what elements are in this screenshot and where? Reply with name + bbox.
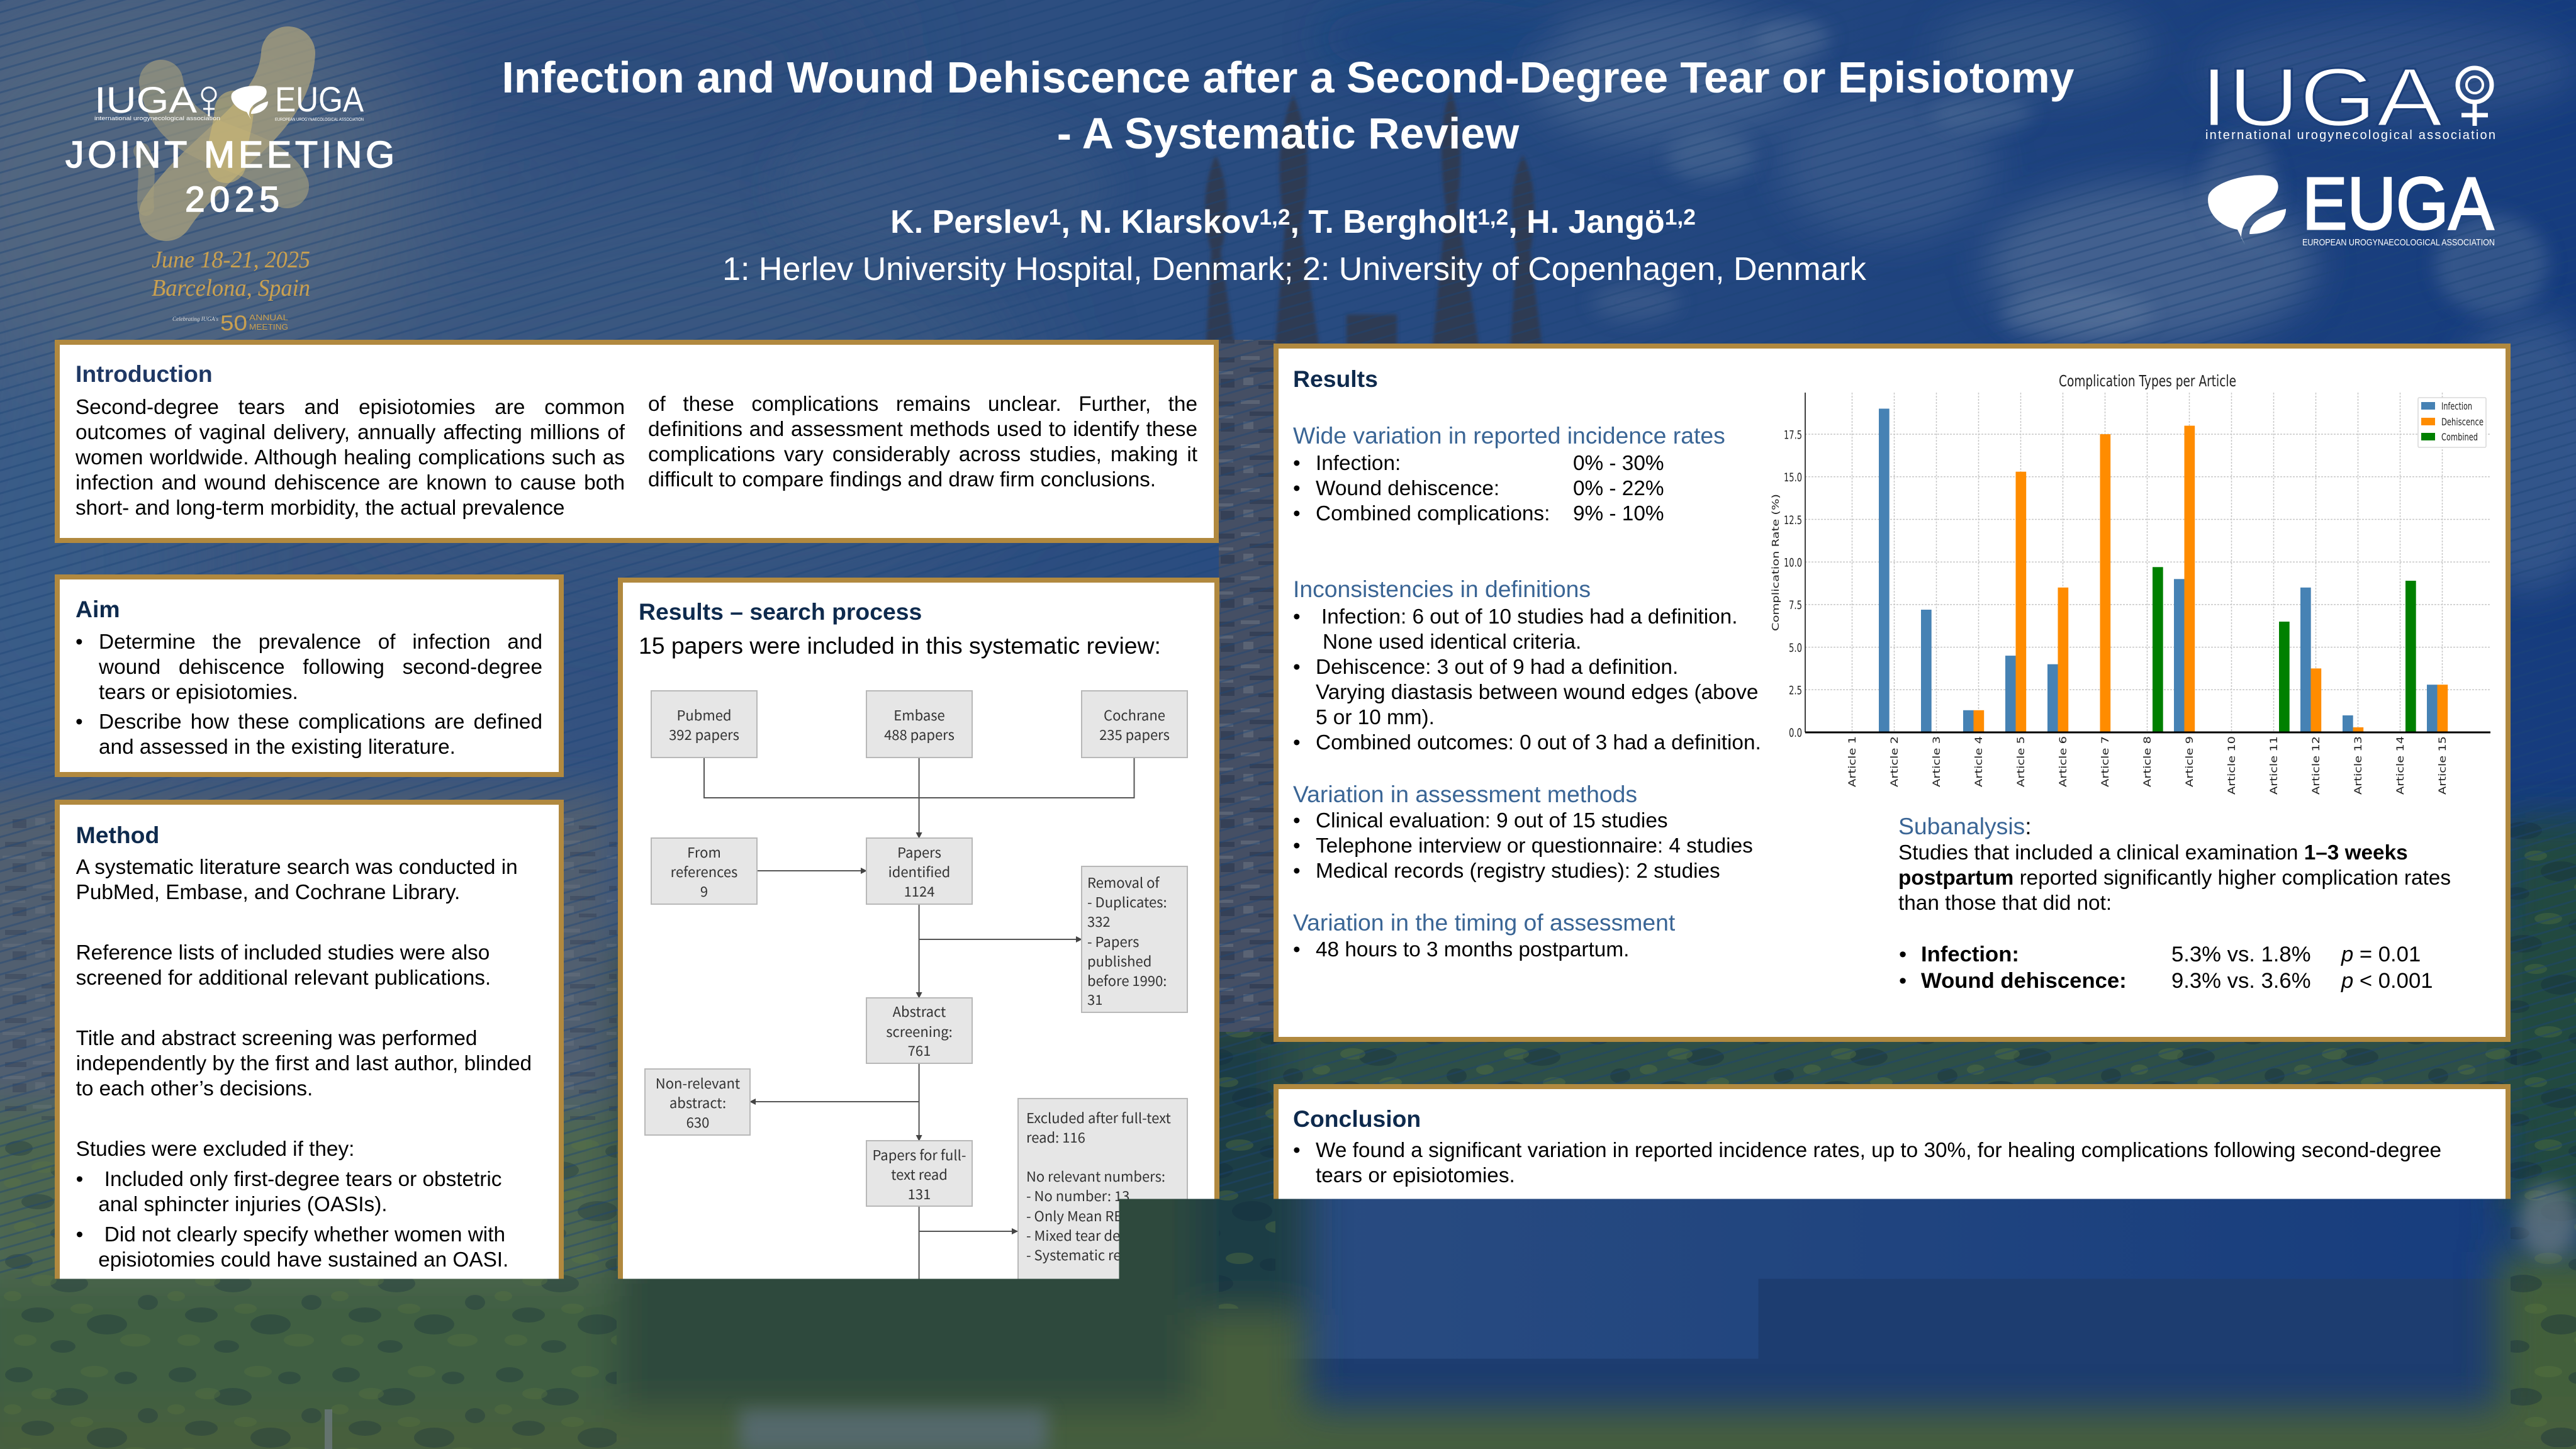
list: aim bullets	[76, 629, 544, 761]
flowchart labels: Cochrane	[1104, 705, 1165, 725]
flowchart: search process: Removal of	[1087, 872, 1160, 892]
flowchart labels: Non-relevant	[656, 1073, 740, 1093]
flowchart: search process: before 1990:	[1087, 970, 1167, 990]
list: aim bullets: Describe how these complications are defined and assessed in the existing literature.	[99, 710, 542, 759]
chart x axis labels: Article 14	[2394, 736, 2406, 795]
list: definitions: Infection: 6 out of 10 studies had a definition.	[1321, 605, 1737, 629]
title	[0, 52, 2576, 159]
list: incidence rates: 0% - 30%	[1573, 452, 1664, 474]
icon: gold ribbon X	[142, 53, 288, 214]
logo: IUGA EUGA Joint Meeting 2025: EUROPEAN UROGYNAECOLOGICAL ASSOCIATION	[275, 118, 364, 122]
chart axes	[1805, 393, 2490, 732]
logo: IUGA EUGA Joint Meeting 2025	[57, 19, 409, 333]
list: incidence rates: 0% - 22%	[1573, 477, 1664, 500]
chart x axis labels: Article 6	[2057, 736, 2069, 787]
list: aim bullets: Determine the prevalence of infection and wound dehiscence following second-degree tears or episiotomies.	[99, 630, 542, 703]
conclusion point 3: cannot be concluded that second-degree tears or episiotomies are associated with a lower risk of healing complications	[1316, 1335, 2422, 1358]
logo: IUGA EUGA Joint Meeting 2025: MEETING	[249, 322, 288, 332]
conclusion point 1: tears or episiotomies.	[1316, 1164, 1515, 1187]
flowchart: search process: - No number: 13	[1026, 1185, 1129, 1206]
list: subanalysis results: 5.3% vs. 1.8%	[2171, 943, 2311, 966]
list: exclusion bullets: •	[76, 1168, 83, 1190]
chart legend: Infection	[2441, 400, 2472, 412]
list: exclusion bullets: Did not clearly specify whether women with	[104, 1223, 505, 1246]
flowchart: search process: - Papers	[1087, 931, 1139, 951]
list: assessment methods: •	[1293, 834, 1301, 858]
logo: IUGA EUGA Joint Meeting 2025: ANNUAL	[249, 313, 288, 322]
text: reference lists: screened for additional relevant publications.	[76, 966, 491, 989]
text: subanalysis: than those that did not:	[1898, 892, 2112, 915]
chart grid	[1805, 393, 2490, 732]
chart x axis labels: Article 4	[1973, 736, 1985, 787]
icon: EUGA leaf	[2208, 175, 2286, 245]
logo: IUGA EUGA Joint Meeting 2025: June 18-21, 2025	[152, 247, 310, 273]
flowchart: search process: Excluded after full-text	[1026, 1107, 1171, 1127]
flowchart labels	[656, 705, 1170, 1353]
heading: results: Results	[1293, 366, 1378, 392]
chart legend: Combined	[2441, 431, 2478, 443]
flowchart: search process: No Full-paper found: 21	[1026, 1323, 1177, 1343]
chart x axis labels: Article 9	[2183, 736, 2195, 787]
chart x axis labels: Article 10	[2226, 736, 2237, 795]
list: exclusion bullets	[76, 1166, 542, 1272]
text: introduction right column: of these complications remains unclear. Further, the definitions and assessment methods used to identify these complications vary considerably across studies, making it difficult to compare findings and draw firm conclusions.	[648, 393, 1197, 491]
flowchart: search process: published	[1087, 951, 1151, 971]
flowchart: search process: - Mixed tear degree: 39	[1026, 1225, 1171, 1245]
panel: results search process	[618, 578, 1219, 1407]
list: exclusion bullets: •	[76, 1223, 83, 1246]
conclusion point 3	[1293, 1309, 2489, 1384]
list: definitions	[1293, 603, 1771, 754]
panel: method	[55, 800, 564, 1406]
text: exclusion intro: Studies were excluded if they:	[76, 1138, 354, 1160]
list: subanalysis results: •	[1899, 969, 1907, 993]
list: assessment methods: •	[1293, 859, 1301, 883]
flowchart labels: screening:	[886, 1021, 953, 1041]
list: incidence rates: •	[1293, 502, 1301, 525]
heading: method: Method	[76, 822, 159, 848]
list: assessment methods: Telephone interview or questionnaire: 4 studies	[1316, 834, 1753, 858]
dehiscence bars	[1973, 426, 2448, 732]
flowchart connectors	[704, 758, 1134, 1323]
list: incidence rates	[1293, 450, 1696, 525]
flowchart labels: Pubmed	[676, 705, 732, 725]
flowchart: search process: - Duplicates:	[1087, 892, 1167, 912]
subheading: timing: Variation in the timing of assessment	[1293, 909, 1675, 936]
conclusion point 3: Reported complication rates were similar to those seen after obstetric anal sphincter injuries (OASI). Based on this review, it	[1316, 1310, 2464, 1333]
title: Infection and Wound Dehiscence after a Second-Degree Tear or Episiotomy	[502, 53, 2074, 102]
list: subanalysis results: p < 0.001	[2341, 969, 2433, 993]
list: assessment methods	[1293, 807, 1759, 883]
city buildings and trees	[0, 793, 2576, 1449]
logo: IUGA and EUGA right: international urogynecological association	[2205, 128, 2495, 142]
flowchart labels: 1124	[904, 881, 934, 901]
heading: conclusion: Conclusion	[1293, 1105, 1421, 1132]
list: subanalysis results	[1899, 941, 2465, 993]
logo: IUGA EUGA Joint Meeting 2025: JOINT MEETING	[65, 134, 395, 176]
chart y axis labels: 17.5	[1784, 428, 1802, 442]
list: timing: 48 hours to 3 months postpartum.	[1316, 938, 1629, 961]
list: definitions: •	[1293, 605, 1301, 629]
list: definitions: •	[1293, 731, 1301, 754]
chart x axis labels: Article 3	[1930, 736, 1942, 787]
conclusion point 3: •	[1293, 1310, 1301, 1333]
chart legend: Dehiscence	[2441, 416, 2484, 428]
panel: aim	[55, 574, 564, 777]
heading: results search process: Results – search process	[639, 598, 922, 625]
conclusion point 1: •	[1293, 1139, 1301, 1162]
chart x axis labels: Article 1	[1846, 736, 1858, 787]
list: exclusion bullets: episiotomies could have sustained an OASI.	[98, 1248, 508, 1271]
flowchart: search process: read: 116	[1026, 1127, 1085, 1147]
chart y axis labels: 7.5	[1789, 598, 1802, 612]
list: incidence rates: Combined complications:	[1316, 502, 1550, 525]
flowchart labels: abstract:	[669, 1092, 726, 1112]
flowchart: search process: No relevant numbers:	[1026, 1166, 1165, 1186]
list: subanalysis results: Infection:	[1921, 943, 2019, 966]
flowchart labels: Embase	[893, 705, 945, 725]
list: definitions: None used identical criteria.	[1323, 630, 1581, 654]
chart x axis labels: Article 11	[2268, 736, 2280, 795]
flowchart labels: papers	[682, 1313, 726, 1333]
text: search strategy: PubMed, Embase, and Cochrane Library.	[76, 881, 460, 904]
conclusion point 2: •	[1293, 1224, 1301, 1248]
flowchart: search process: Not in English: 18	[1026, 1284, 1138, 1304]
towers	[1205, 90, 1543, 352]
panel: conclusion	[1274, 1084, 2511, 1418]
flowchart: search process: - Only Mean REEDA: 12	[1026, 1206, 1170, 1226]
subheading: incidence rates: Wide variation in reported incidence rates	[1293, 422, 1725, 449]
list: assessment methods: •	[1293, 809, 1301, 832]
flowchart: search process: 31	[1087, 989, 1102, 1009]
subheading: assessment methods: Variation in assessment methods	[1293, 781, 1637, 807]
affiliations: 1: Herlev University Hospital, Denmark; 2: University of Copenhagen, Denmark	[722, 251, 1866, 288]
conclusion point 2: approach in future studies.	[1316, 1250, 1563, 1273]
chart x axis labels: Article 15	[2436, 736, 2448, 795]
chart x axis labels: Article 2	[1888, 736, 1900, 787]
chart y axis labels: 12.5	[1784, 513, 1802, 527]
text: screening: independently by the first and last author, blinded	[76, 1052, 532, 1075]
flowchart labels: 9	[700, 881, 708, 901]
conclusion point 1	[1293, 1137, 2489, 1187]
list: definitions: Combined outcomes: 0 out of 3 had a definition.	[1316, 731, 1761, 754]
text: subanalysis: Studies that included a clinical examination 1–3 weeks	[1898, 841, 2408, 864]
chart title: Complication Types per Article	[2059, 372, 2236, 390]
flowchart labels: From	[687, 842, 721, 862]
list: incidence rates: •	[1293, 477, 1301, 500]
chart x axis labels: Article 5	[2015, 736, 2027, 787]
text: subanalysis: postpartum reported significantly higher complication rates	[1898, 866, 2451, 890]
chart y axis labels: 0.0	[1789, 726, 1802, 740]
text: subanalysis	[1898, 841, 2451, 916]
list: subanalysis results: p = 0.01	[2341, 943, 2421, 966]
list: incidence rates: Wound dehiscence:	[1316, 477, 1499, 500]
list: assessment methods: Medical records (registry studies): 2 studies	[1316, 859, 1720, 883]
infection bars	[1879, 409, 2438, 732]
text: screening: to each other’s decisions.	[76, 1077, 313, 1100]
flowchart labels: Abstract	[893, 1001, 946, 1021]
combined bars	[2153, 567, 2416, 732]
flowchart labels: Papers for full-	[872, 1144, 966, 1165]
heading: introduction: Introduction	[76, 361, 213, 387]
list: subanalysis results: •	[1899, 943, 1907, 966]
list: aim bullets: •	[76, 710, 83, 734]
list: exclusion bullets: Included only first-degree tears or obstetric	[104, 1168, 501, 1190]
conclusion point 3: compared to OASI.	[1316, 1360, 1494, 1384]
logo: IUGA EUGA Joint Meeting 2025: 2025	[185, 179, 279, 220]
text: search strategy: A systematic literature search was conducted in	[76, 856, 518, 878]
icon: female symbol small	[202, 87, 216, 116]
flowchart labels: text read	[891, 1164, 948, 1184]
heading: aim: Aim	[76, 596, 120, 622]
icon: female symbol	[2458, 68, 2492, 126]
text: reference lists: Reference lists of included studies were also	[76, 941, 490, 964]
text: papers included: 15 papers were included in this systematic review:	[639, 632, 1161, 659]
authors: K. Perslev1, N. Klarskov1,2, T. Bergholt1,2, H. Jangö1,2	[890, 204, 1696, 240]
text: quality assessment	[76, 1307, 532, 1358]
chart legend	[2418, 398, 2486, 447]
logo: IUGA EUGA Joint Meeting 2025: international urogynecological association	[94, 115, 220, 121]
title: - A Systematic Review	[1057, 109, 1519, 158]
flowchart labels: Papers	[897, 842, 941, 862]
conclusion point 2: There was a large variation in how complications were defined and assessed, highlighting the need for a more standardized	[1316, 1224, 2461, 1248]
chart x axis labels: Article 7	[2099, 736, 2111, 787]
flowchart labels: 131	[908, 1183, 931, 1204]
flowchart labels: identified	[888, 861, 950, 881]
flowchart labels: 235 papers	[1099, 724, 1170, 744]
list: definitions: Dehiscence: 3 out of 9 had a definition.	[1316, 656, 1678, 679]
bar chart: complication types per article	[1274, 344, 2511, 1042]
flowchart labels: 630	[686, 1112, 709, 1132]
subheading: definitions: Inconsistencies in definitions	[1293, 576, 1591, 602]
text: quality assessment: The methodological quality of all included studies	[76, 1309, 532, 1331]
list: aim bullets: •	[76, 630, 83, 653]
list: timing: •	[1293, 938, 1301, 961]
flowchart labels: 761	[908, 1040, 931, 1060]
flowchart labels: references	[671, 861, 737, 881]
conclusion point 2	[1293, 1222, 2489, 1273]
logo: IUGA EUGA Joint Meeting 2025: Celebrating IUGA's	[172, 316, 218, 322]
chart y axis labels: 10.0	[1784, 556, 1802, 570]
list: incidence rates: •	[1293, 452, 1301, 474]
list: subanalysis results: 9.3% vs. 3.6%	[2171, 969, 2311, 993]
subheading: subanalysis: Subanalysis:	[1898, 813, 2032, 839]
flowchart labels: 488 papers	[884, 724, 955, 744]
chart y axis title: Complication Rate (%)	[1770, 494, 1781, 631]
text: introduction left column: Second-degree tears and episiotomies are common outcomes of vaginal delivery, annually affecting millions of women worldwide. Although healing complications such as infection and wound dehiscence are known to cause both short- and long-term morbidity, the actual prevalence	[76, 396, 625, 520]
flowchart: search process	[618, 578, 1219, 1407]
text: screening	[76, 1026, 532, 1101]
logo: IUGA EUGA Joint Meeting 2025: EUGA	[275, 79, 364, 119]
list: assessment methods: Clinical evaluation: 9 out of 15 studies	[1316, 809, 1668, 832]
chart x axis labels	[1846, 736, 2448, 795]
conclusion point 1: We found a significant variation in reported incidence rates, up to 30%, for healing complications following second-degree	[1316, 1139, 2441, 1162]
chart y axis labels	[1784, 428, 1802, 740]
flowchart: search process: 332	[1087, 911, 1111, 931]
list: definitions: •	[1293, 656, 1301, 679]
list: incidence rates: Infection:	[1316, 452, 1401, 474]
list: incidence rates: 9% - 10%	[1573, 502, 1664, 525]
text: screening: Title and abstract screening was performed	[76, 1027, 477, 1049]
chart y axis labels: 2.5	[1789, 683, 1802, 697]
flowchart labels: Included	[676, 1294, 732, 1314]
chart x axis labels: Article 8	[2141, 736, 2153, 787]
logo: IUGA and EUGA right	[2196, 60, 2504, 252]
list: subanalysis results: Wound dehiscence:	[1921, 969, 2127, 993]
panel: results	[1274, 344, 2511, 1042]
flowchart labels: 392 papers	[669, 724, 739, 744]
chart y axis labels: 5.0	[1789, 641, 1802, 655]
logo: IUGA EUGA Joint Meeting 2025: IUGA	[94, 80, 197, 121]
list: exclusion bullets: anal sphincter injuries (OASIs).	[98, 1193, 388, 1216]
list: definitions: 5 or 10 mm).	[1316, 706, 1435, 729]
chart y axis labels: 15.0	[1784, 471, 1802, 484]
icon: EUGA leaf small	[232, 86, 268, 120]
list: definitions: Varying diastasis between wound edges (above	[1316, 681, 1758, 704]
chart x axis labels: Article 13	[2352, 736, 2364, 795]
logo: IUGA EUGA Joint Meeting 2025: Barcelona, Spain	[152, 275, 310, 301]
flowchart labels: 15	[697, 1333, 712, 1353]
text: search strategy	[76, 854, 518, 905]
chart x axis labels: Article 12	[2310, 736, 2322, 795]
flowchart boxes	[645, 691, 1187, 1363]
flowchart: search process: - Systematic review: 13	[1026, 1245, 1173, 1265]
panel: introduction	[55, 340, 1219, 543]
text: reference lists	[76, 940, 491, 990]
text: quality assessment: was assessed using the SIGN checklist.	[76, 1334, 448, 1357]
